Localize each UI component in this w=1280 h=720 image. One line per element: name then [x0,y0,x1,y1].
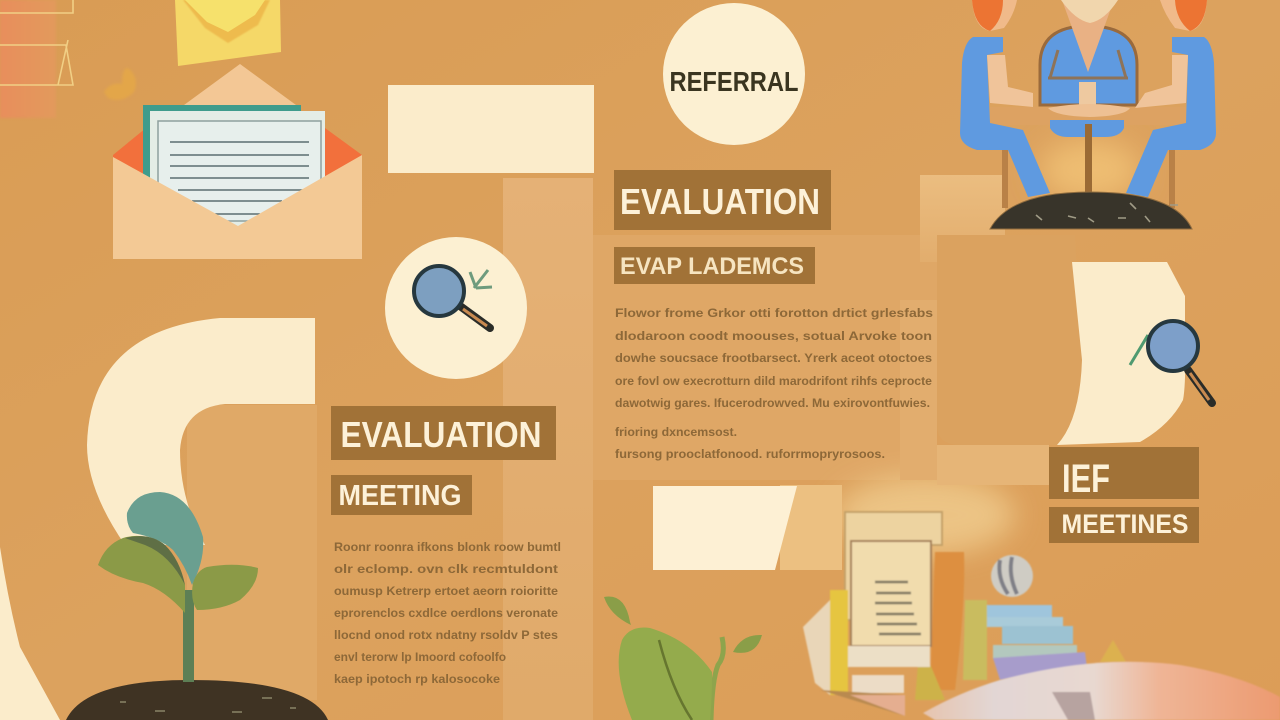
text block: left paragraph: envl terorw lp Imoord cofoolfo [334,650,506,664]
corner decoration: top left notes [0,0,136,118]
heading: right label [1049,447,1199,501]
heading: evaluation centre [614,170,831,230]
subheading: centre [614,247,815,284]
shape: bottom right swirl [923,662,1280,720]
shape: lower left cream sliver [0,547,60,720]
text block: left paragraph: kaep ipotoch rp kalosocoke [334,672,500,686]
icon: seedling with soil [66,492,328,720]
text block: centre paragraph: dawotwig gares. Ifucerodrowved. Mu exirovontfuwies. [615,396,930,410]
text block: centre paragraph: dlodaroon coodt moouses, sotual Arvoke toon [615,329,932,343]
text block: left paragraph: llocnd onod rotx ndatny rsoldv P stes [334,628,558,642]
text block: left paragraph: oumusp Ketrerp ertoet aeorn roioritte [334,584,558,598]
icon: open envelope with letter [113,64,362,259]
subheading: meetines: MEETINES [1062,509,1188,539]
text block: left paragraph: eprorenclos cxdlce oerdlons veronate [334,606,558,620]
panel: top blank note [388,85,594,173]
subheading: meeting: MEETING [338,480,462,512]
badge: referral circle: REFERRAL [670,66,798,97]
shape: right cream note [1057,262,1185,445]
text block: left paragraph: olr eclomp. ovn clk recmtuldont [334,562,558,576]
text block: centre paragraph: Flowor frome Grkor otti forotton drtict grlesfabs [615,306,933,320]
heading: evaluation centre: EVALUATION [620,181,820,222]
shape: curved cream band [87,318,315,545]
text block: left paragraph: Roonr roonra ifkons blonk roow bumtl [334,540,561,554]
text block: centre paragraph [615,306,933,461]
text block: left paragraph [334,540,561,686]
text block: centre paragraph: ore fovl ow execrotturn dild marodrifont rihfs ceprocte [615,374,932,388]
icon: documents and books stack [803,512,1126,716]
heading: evaluation left [331,406,556,460]
subheading: centre: EVAP LADEMCS [620,253,804,280]
icon: magnifier right [1130,321,1212,403]
heading: evaluation left: EVALUATION [340,414,542,455]
text block: centre paragraph: frioring dxncemsost. [615,425,737,439]
icon: people at a table [960,0,1216,229]
heading: right label: IEF [1062,457,1110,501]
badge: referral circle [663,3,805,145]
icon: green plant [604,597,762,720]
text block: centre paragraph: dowhe soucsace frootbarsect. Yrerk aceot otoctoes [615,351,932,365]
icon: yellow envelope [175,0,281,66]
text block: centre paragraph: fursong prooclatfonood. ruforrmopryrosoos. [615,447,885,461]
panel: bottom blank note [653,485,842,570]
icon: magnifier circle [385,237,527,379]
